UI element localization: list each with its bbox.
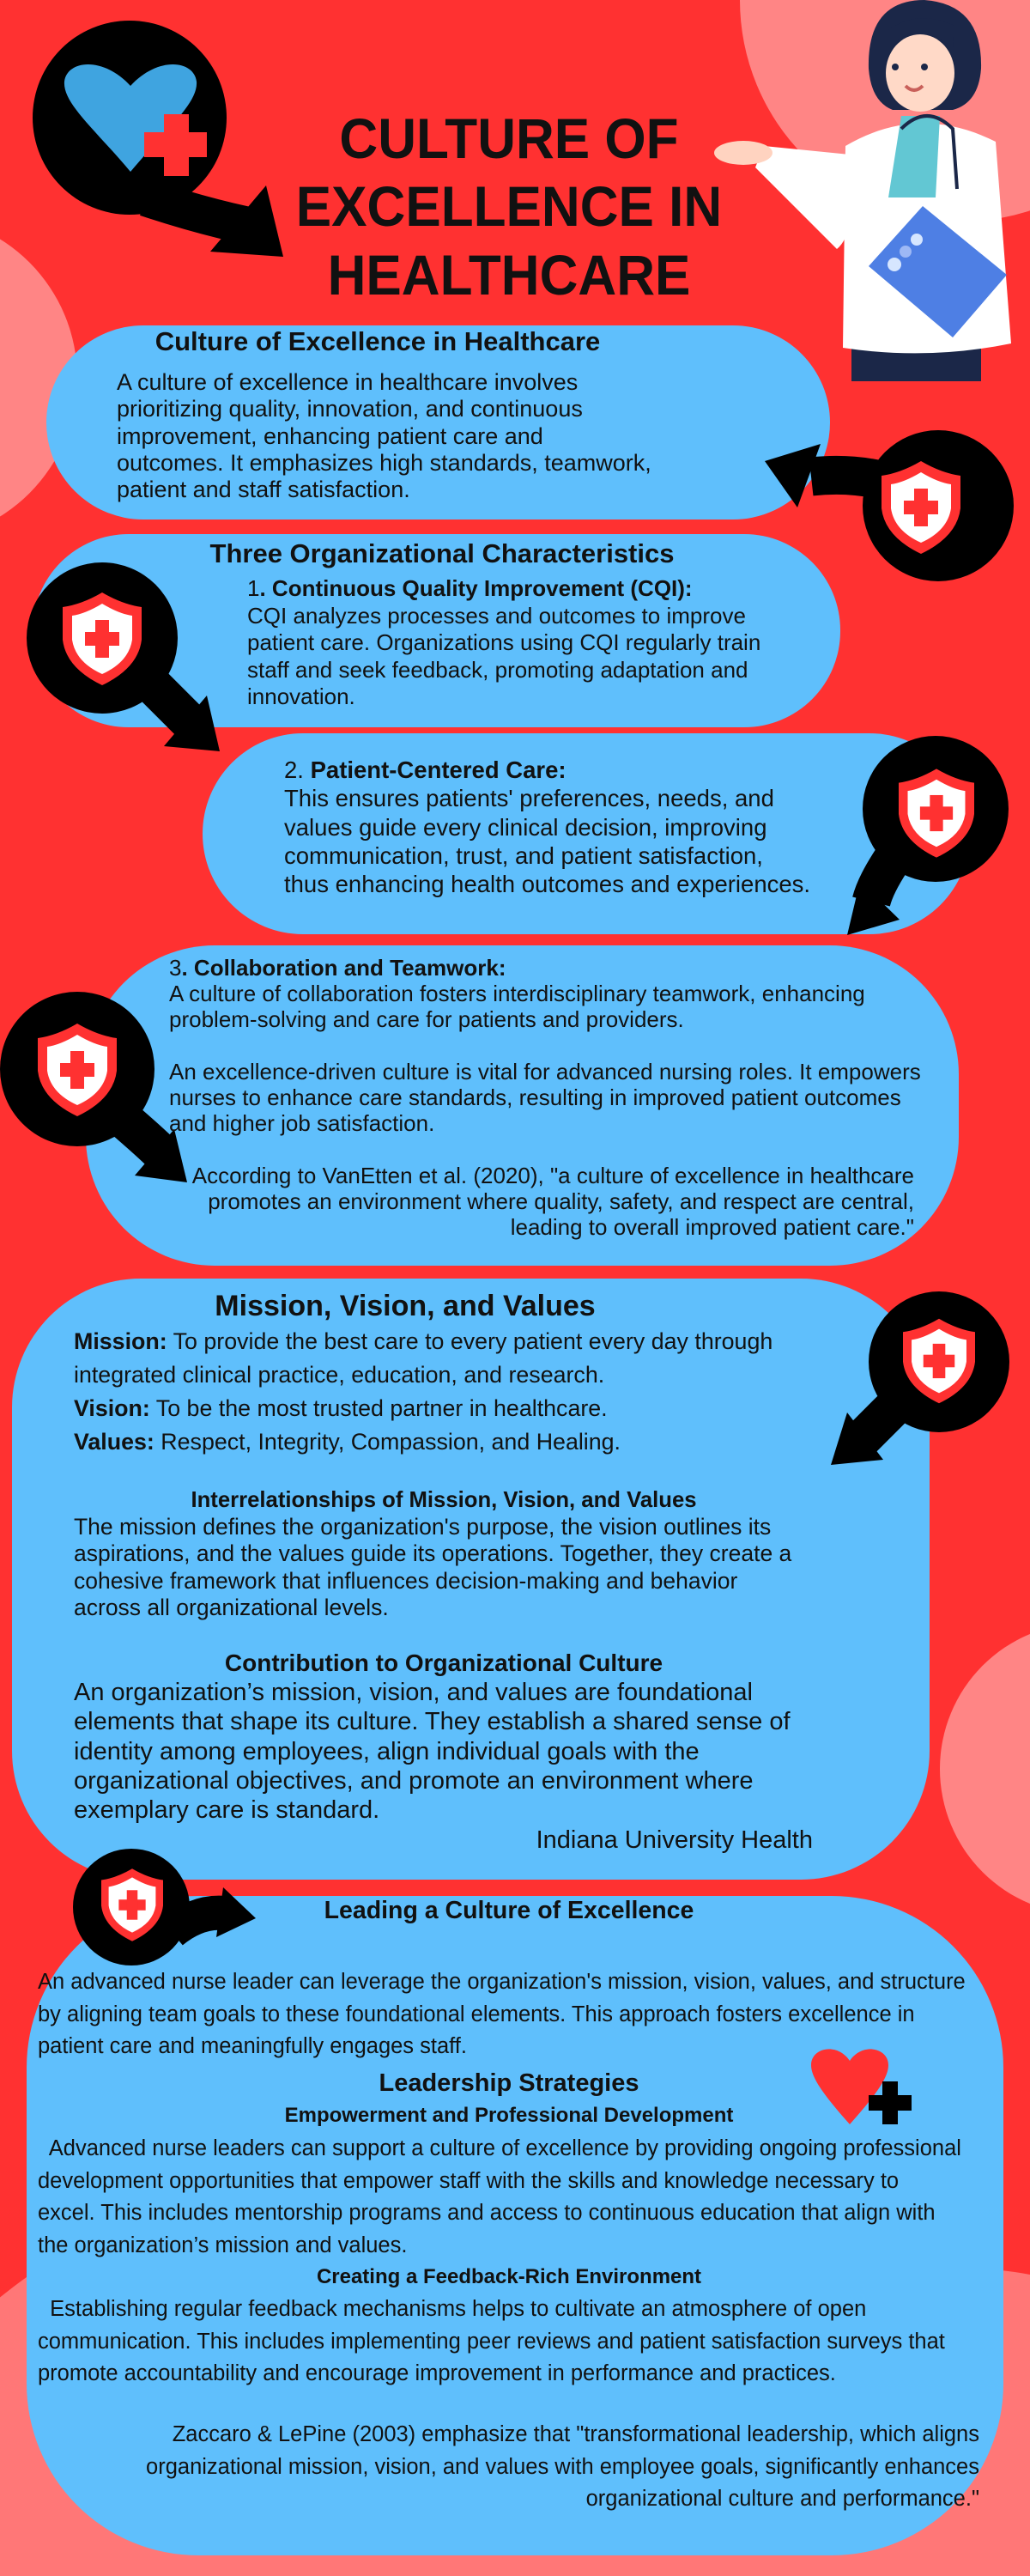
panel: patient-centered — [203, 733, 970, 934]
text: leading intro: by aligning team goals to these foundational elements. This approach fosters excellence in — [38, 2002, 915, 2026]
text: interrelationships: The mission defines the organization's purpose, the vision outlines its — [74, 1514, 771, 1540]
quote: VanEtten: promotes an environment where quality, safety, and respect are central, — [208, 1188, 914, 1214]
quote: VanEtten: According to VanEtten et al. (2020), "a culture of excellence in healthcare — [192, 1163, 914, 1188]
text: contribution: elements that shape its culture. They establish a shared sense of — [74, 1708, 791, 1735]
title: EXCELLENCE IN — [296, 174, 722, 238]
icon: heart bubble — [33, 21, 283, 257]
text: intro: A culture of excellence in healthcare involves — [117, 369, 578, 395]
text: interrelationships: cohesive framework that influences decision-making and behavior — [74, 1568, 737, 1594]
heading: interrelationships: Interrelationships of Mission, Vision, and Values — [191, 1488, 697, 1512]
heading: three characteristics: Three Organizational Characteristics — [210, 538, 674, 568]
text: feedback: Establishing regular feedback mechanisms helps to cultivate an atmosphere of open — [50, 2297, 866, 2321]
text: collaboration: problem-solving and care for patients and providers. — [169, 1006, 684, 1032]
heading: contribution: Contribution to Organizational Culture — [225, 1649, 663, 1676]
text: collaboration: nurses to enhance care standards, resulting in improved patient outcomes — [169, 1084, 901, 1110]
quote: Zaccaro & LePine: organizational culture and performance." — [586, 2487, 979, 2511]
quote: Zaccaro & LePine — [146, 2422, 979, 2511]
text: leading intro: An advanced nurse leader can leverage the organization's mission, vision, values, and structure — [38, 1970, 966, 1994]
text: interrelationships: across all organizational levels. — [74, 1595, 389, 1620]
text: intro: prioritizing quality, innovation, and continuous — [117, 396, 583, 422]
text: mission vision values — [74, 1328, 772, 1455]
icon: shield bubble 4 — [0, 992, 187, 1182]
quote: VanEtten: leading to overall improved patient care." — [511, 1214, 914, 1240]
text: collaboration: 3. Collaboration and Teamwork: — [169, 955, 506, 981]
text: patient-centered care: communication, trust, and patient satisfaction, — [284, 842, 763, 869]
heading: feedback: Creating a Feedback-Rich Environment — [317, 2265, 701, 2288]
panel: mission vision values — [12, 1279, 930, 1880]
text: patient-centered care: thus enhancing health outcomes and experiences. — [284, 871, 810, 897]
text: patient-centered care: 2. Patient-Centered Care: — [284, 756, 566, 783]
text: contribution: organizational objectives, and promote an environment where — [74, 1767, 754, 1795]
text: collaboration: and higher job satisfaction. — [169, 1110, 434, 1136]
text: collaboration: A culture of collaboration fosters interdisciplinary teamwork, enhancing — [169, 981, 865, 1006]
icon: shield bubble 3 — [847, 736, 1009, 935]
text: patient-centered care: values guide every clinical decision, improving — [284, 814, 767, 841]
text: empowerment — [38, 2136, 961, 2257]
quote: VanEtten — [192, 1163, 914, 1240]
text: feedback: communication. This includes implementing peer reviews and patient satisfaction surveys that — [38, 2329, 945, 2353]
source: Indiana University Health: Indiana University Health — [536, 1826, 813, 1854]
text: empowerment: excel. This includes mentorship programs and access to continuous education that align with — [38, 2201, 936, 2225]
text: intro — [117, 369, 651, 502]
text: contribution: identity among employees, align individual goals with the — [74, 1738, 700, 1765]
text: contribution — [74, 1679, 791, 1824]
text: feedback — [38, 2297, 945, 2385]
heading: empowerment: Empowerment and Professional Development — [285, 2104, 733, 2127]
text: empowerment: Advanced nurse leaders can support a culture of excellence by providing ongoing professional — [49, 2136, 961, 2160]
text: CQI: patient care. Organizations using CQI regularly train — [247, 629, 760, 655]
icon: shield bubble 5 — [831, 1291, 1009, 1465]
text: interrelationships — [74, 1514, 791, 1620]
icon: shield bubble 6 — [73, 1849, 256, 1965]
text: intro: improvement, enhancing patient care and — [117, 423, 543, 449]
text: contribution: exemplary care is standard. — [74, 1796, 379, 1824]
text: leading intro — [38, 1970, 966, 2058]
text: CQI — [247, 575, 760, 709]
text: empowerment: development opportunities that empower staff with the skills and knowledge necessary to — [38, 2169, 899, 2193]
text: CQI: 1. Continuous Quality Improvement (CQI): — [247, 575, 693, 601]
heading: culture of excellence: Culture of Excellence in Healthcare — [155, 326, 600, 356]
title — [296, 106, 722, 307]
text: interrelationships: aspirations, and the values guide its operations. Together, they create a — [74, 1540, 791, 1566]
panel: characteristics — [33, 534, 840, 727]
text: intro: outcomes. It emphasizes high standards, teamwork, — [117, 450, 651, 476]
text: intro: patient and staff satisfaction. — [117, 477, 410, 502]
quote: Zaccaro & LePine: Zaccaro & LePine (2003) emphasize that "transformational leadership, which aligns — [173, 2422, 979, 2446]
panel: collaboration — [86, 945, 959, 1266]
text: mission vision values: Values: Respect, Integrity, Compassion, and Healing. — [74, 1429, 621, 1455]
text: CQI: CQI analyzes processes and outcomes to improve — [247, 603, 746, 629]
text: CQI: staff and seek feedback, promoting adaptation and — [247, 656, 748, 682]
text: mission vision values: Vision: To be the most trusted partner in healthcare. — [74, 1395, 608, 1421]
text: collaboration — [169, 955, 921, 1136]
panel: leading culture — [27, 1896, 1003, 2555]
text: patient-centered care: This ensures patients' preferences, needs, and — [284, 785, 774, 811]
heading: leading a culture: Leading a Culture of Excellence — [324, 1897, 694, 1924]
text: mission vision values: integrated clinical practice, education, and research. — [74, 1362, 604, 1388]
heading: mission vision values: Mission, Vision, and Values — [215, 1290, 596, 1322]
heading: leadership strategies: Leadership Strategies — [379, 2069, 639, 2097]
text: patient-centered care — [284, 756, 810, 897]
text: feedback: promote accountability and encourage improvement in performance and practices. — [38, 2361, 836, 2385]
icon: red heart with black cross — [811, 2049, 912, 2124]
panel: intro — [46, 325, 830, 519]
text: mission vision values: Mission: To provide the best care to every patient every day through — [74, 1328, 772, 1354]
text: collaboration: An excellence-driven culture is vital for advanced nursing roles. It empowers — [169, 1059, 921, 1084]
text: empowerment: the organization’s mission and values. — [38, 2233, 407, 2257]
illustration: doctor — [714, 0, 1011, 381]
title: HEALTHCARE — [328, 243, 690, 307]
quote: Zaccaro & LePine: organizational mission, vision, and values with employee goals, significantly enhances — [146, 2454, 979, 2478]
title: CULTURE OF — [339, 106, 679, 170]
text: leading intro: patient care and meaningfully engages staff. — [38, 2034, 467, 2058]
text: CQI: innovation. — [247, 683, 355, 709]
icon: shield bubble 1 — [765, 430, 1014, 581]
text: contribution: An organization’s mission, vision, and values are foundational — [74, 1679, 753, 1706]
icon: shield bubble 2 — [27, 562, 220, 751]
